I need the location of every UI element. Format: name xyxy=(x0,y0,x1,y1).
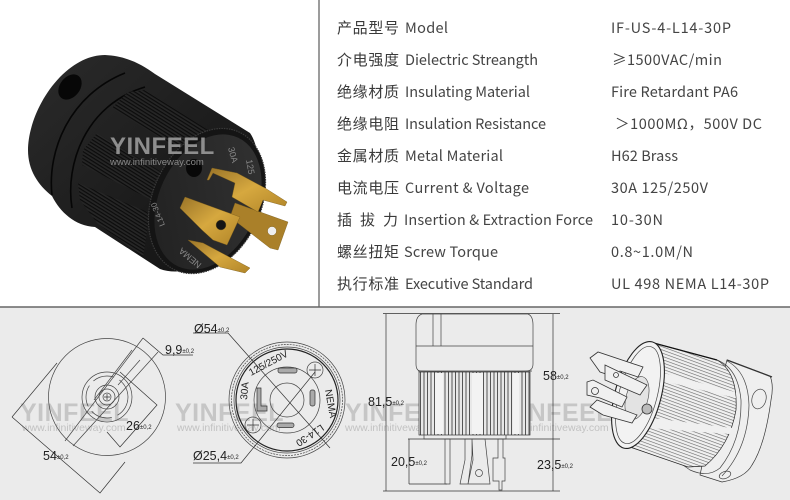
rib group top xyxy=(112,90,208,150)
dimension 9,9: 9,9 xyxy=(165,343,182,357)
row: dielectric strength: ≥1500VAC/min xyxy=(612,49,722,70)
watermark: YINFEEL xyxy=(110,133,215,160)
row: insertion force xyxy=(337,209,663,230)
dimension 9,9: ±0,2 xyxy=(182,349,195,355)
watermark: www.infinitiveway.com xyxy=(109,157,204,168)
face markings: 125 xyxy=(244,159,256,175)
face screw xyxy=(186,159,202,177)
row: insulation resistance: Insulation Resistance xyxy=(405,113,546,134)
row: model: 产品型号 xyxy=(337,17,399,38)
dimension 81,5: 81,5 xyxy=(368,395,392,409)
bottom watermarks: www.infinitiveway.com xyxy=(504,422,609,434)
face labels: 125/250V xyxy=(247,349,291,379)
dimension 23,5: ±0,2 xyxy=(561,464,574,470)
dimension diameter 54: ±0,2 xyxy=(218,328,230,334)
row: executive standard: 执行标准 xyxy=(337,273,399,294)
row: dielectric strength xyxy=(337,49,722,70)
row: model xyxy=(337,17,731,38)
plug body silhouette xyxy=(28,55,258,271)
row: insulation resistance: ＞1000MΩ，500V DC xyxy=(615,113,762,134)
row: dielectric strength: Dielectric Streangth xyxy=(405,49,538,70)
face labels: L14-30 xyxy=(293,422,325,448)
drawing: rear view xyxy=(12,338,195,493)
row: insertion force: Insertion & Extraction Force xyxy=(404,209,593,230)
drawing: side view xyxy=(368,314,574,491)
bottom watermarks: www.infinitiveway.com xyxy=(176,422,281,434)
screws xyxy=(307,362,323,378)
dimension 20,5: ±0,2 xyxy=(415,461,428,467)
slots xyxy=(257,368,315,428)
bottom watermarks xyxy=(20,399,767,434)
face labels: 30A xyxy=(239,381,252,400)
panel: technical drawings xyxy=(0,307,790,500)
row: insulating material: Insulating Material xyxy=(405,81,530,102)
row: current and voltage: 电流电压 xyxy=(337,177,399,198)
bottom watermarks: www.infinitiveway.com xyxy=(659,422,764,434)
face markings xyxy=(149,146,256,270)
row: insulating material xyxy=(337,81,738,102)
row: insulation resistance: 绝缘电阻 xyxy=(337,113,399,134)
smooth bands on body xyxy=(648,372,736,434)
rib group middle xyxy=(82,133,163,200)
collar groove and edges xyxy=(51,73,145,208)
plug front face xyxy=(134,117,282,287)
row: executive standard: UL 498 NEMA L14-30P xyxy=(611,273,769,294)
dimension 26: ±0,2 xyxy=(140,425,152,431)
face markings: NEMA xyxy=(177,246,203,270)
face labels: NEMA xyxy=(322,389,338,419)
dimension diameter 25,4: Ø25,4 xyxy=(193,449,227,463)
bottom watermarks: www.infinitiveway.com xyxy=(344,422,449,434)
dimension 81,5: ±0,2 xyxy=(392,401,405,407)
bottom watermarks: YINFEEL xyxy=(175,399,284,427)
row: executive standard: Executive Standard xyxy=(405,273,533,294)
front face xyxy=(602,336,674,454)
row: insulating material: 绝缘材质 xyxy=(337,81,399,102)
row: current and voltage: 30A 125/250V xyxy=(611,177,709,198)
row: screw torque: Screw Torque xyxy=(404,241,498,262)
dimension 54: ±0,2 xyxy=(57,455,69,461)
row: dielectric strength: 介电强度 xyxy=(337,49,399,70)
cable screw hole xyxy=(54,70,86,104)
drawing: isometric view xyxy=(587,336,772,482)
row: current and voltage xyxy=(337,177,709,198)
dimension 23,5: 23,5 xyxy=(537,458,561,472)
rear cap xyxy=(700,360,772,482)
face markings: L14-30 xyxy=(149,201,167,228)
row: metal material xyxy=(337,145,678,166)
brass blades xyxy=(180,168,288,273)
bottom watermarks: YINFEEL xyxy=(345,399,454,427)
face markings: 30A xyxy=(226,146,240,164)
bottom watermarks: YINFEEL xyxy=(658,399,767,427)
ribbed body xyxy=(419,372,530,435)
row: metal material: H62 Brass xyxy=(611,145,678,166)
drawing: front face xyxy=(193,322,345,463)
row: screw torque xyxy=(337,241,693,262)
blades xyxy=(587,352,647,423)
dimension 20,5: 20,5 xyxy=(391,455,415,469)
row: insulation resistance xyxy=(337,113,762,134)
specification table xyxy=(337,17,769,294)
dimension 58: 58 xyxy=(543,369,557,383)
bottom watermarks: YINFEEL xyxy=(20,399,129,427)
ribbed body xyxy=(630,342,736,467)
row: insulating material: Fire Retardant PA6 xyxy=(611,81,738,102)
rib group bottom xyxy=(78,183,150,257)
bottom watermarks: www.infinitiveway.com xyxy=(21,422,126,434)
collar xyxy=(680,360,741,474)
row: executive standard xyxy=(337,273,769,294)
row: insertion force: 10-30N xyxy=(611,209,663,230)
dimension diameter 25,4: ±0,2 xyxy=(227,455,239,461)
prongs xyxy=(445,439,505,490)
row: current and voltage: Current & Voltage xyxy=(405,177,529,198)
row: model: Model xyxy=(405,17,448,38)
bottom watermarks: YINFEEL xyxy=(503,399,612,427)
face labels xyxy=(239,349,338,448)
dimension 54: 54 xyxy=(43,449,57,463)
row: model: IF-US-4-L14-30P xyxy=(611,17,731,38)
row: screw torque: 0.8~1.0M/N xyxy=(611,241,693,262)
plug front face rim xyxy=(126,109,288,293)
row: metal material: 金属材质 xyxy=(337,145,399,166)
dimension diameter 54: Ø54 xyxy=(194,322,218,336)
vertical divider xyxy=(318,0,320,307)
dimension 58: ±0,2 xyxy=(557,375,569,381)
row: insertion force: 插 拔 力 xyxy=(337,209,398,230)
panel: product photo xyxy=(0,0,319,307)
row: screw torque: 螺丝扭矩 xyxy=(337,241,399,262)
row: metal material: Metal Material xyxy=(405,145,503,166)
dimension 26: 26 xyxy=(126,419,140,433)
